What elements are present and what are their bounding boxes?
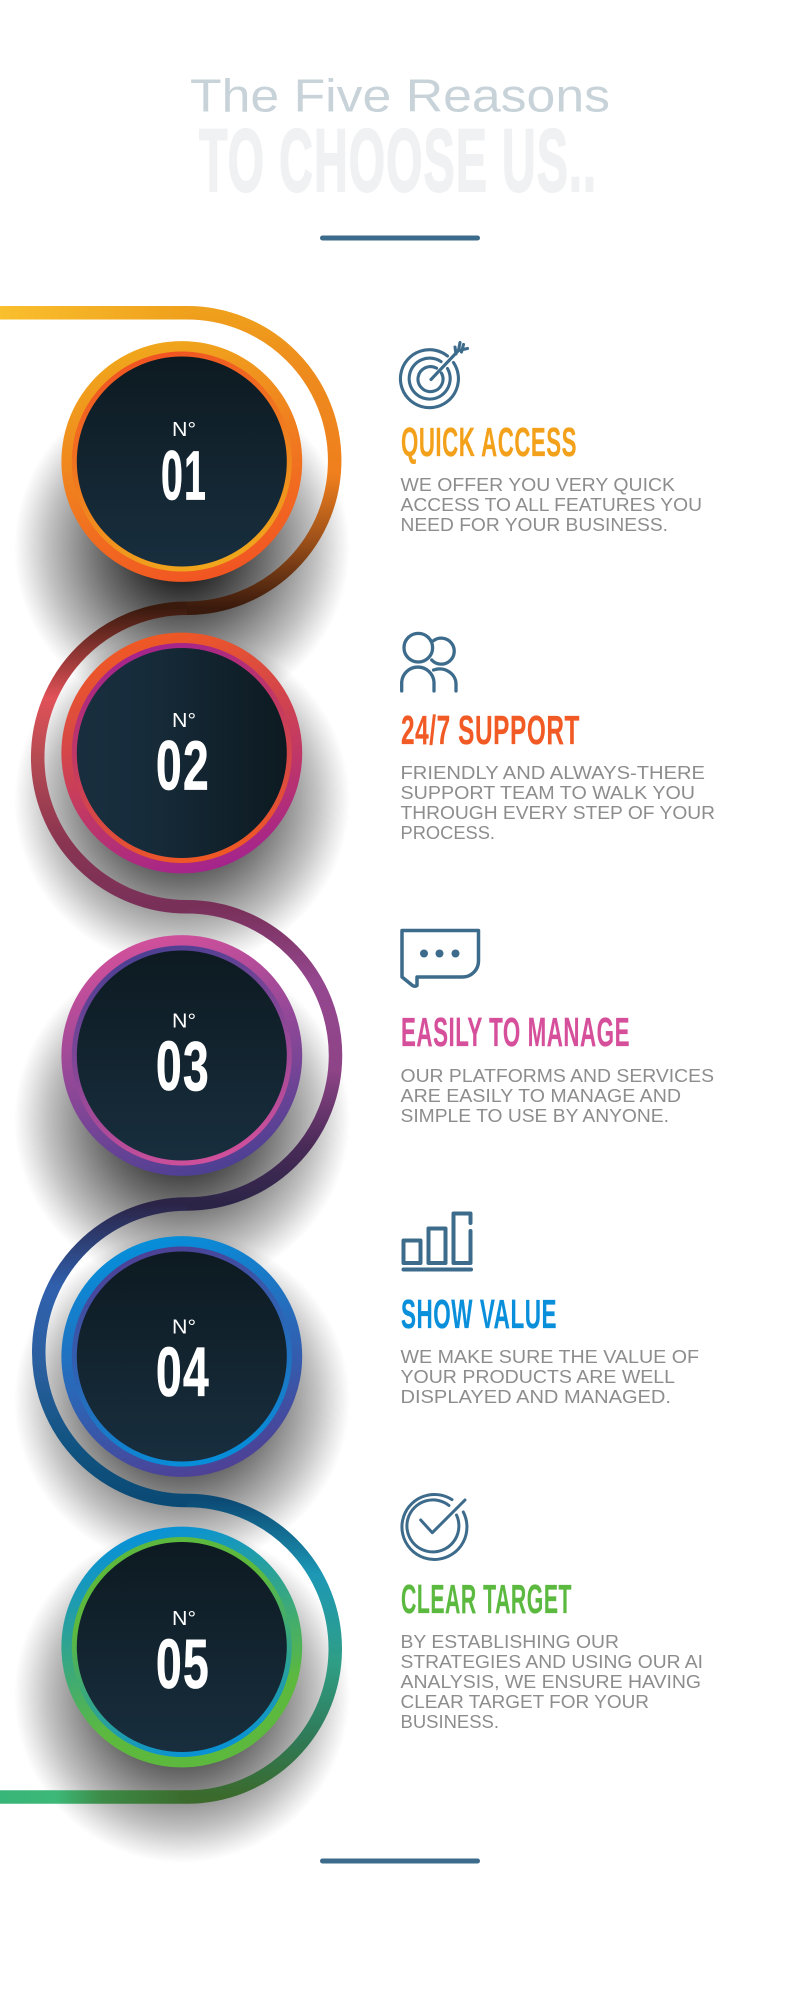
circle 03: 03 <box>156 1027 210 1105</box>
description: quick access: WE OFFER YOU VERY QUICK <box>400 474 676 495</box>
description: clear target <box>400 1631 703 1732</box>
description: easily to manage: SIMPLE TO USE BY ANYONE. <box>400 1105 669 1126</box>
description: quick access: ACCESS TO ALL FEATURES YOU <box>400 494 702 515</box>
circle 01: N° <box>172 419 196 441</box>
circle 02: N° <box>172 710 196 732</box>
description: clear target: BUSINESS. <box>400 1711 499 1732</box>
circle 05 <box>61 1527 302 1767</box>
description: show value: YOUR PRODUCTS ARE WELL <box>400 1366 675 1387</box>
heading: show value: SHOW VALUE <box>401 1291 557 1337</box>
description: easily to manage: OUR PLATFORMS AND SERVICES <box>400 1065 714 1086</box>
description: show value <box>400 1346 699 1407</box>
description: quick access: NEED FOR YOUR BUSINESS. <box>400 514 668 535</box>
description: easily to manage: ARE EASILY TO MANAGE AND <box>400 1085 681 1106</box>
description: 24/7 support <box>400 762 715 843</box>
description: quick access <box>400 474 702 535</box>
description: 24/7 support: THROUGH EVERY STEP OF YOUR <box>400 802 715 823</box>
icon: two people <box>402 633 456 691</box>
description: clear target: CLEAR TARGET FOR YOUR <box>400 1691 649 1712</box>
circle 01: 01 <box>161 436 207 514</box>
description: show value: DISPLAYED AND MANAGED. <box>400 1386 671 1407</box>
icon: chat bubble <box>402 930 478 986</box>
circle 02 <box>61 633 302 873</box>
winding gradient ribbon path <box>0 313 335 1797</box>
title <box>190 70 610 210</box>
circle 04: N° <box>172 1316 196 1338</box>
description: 24/7 support: SUPPORT TEAM TO WALK YOU <box>400 782 695 803</box>
icon: check mark in circle <box>402 1494 467 1559</box>
circle 03: N° <box>172 1010 196 1032</box>
bottom divider <box>320 1858 480 1864</box>
circle 04 <box>61 1236 302 1477</box>
circle 05: N° <box>172 1608 196 1630</box>
heading: clear target: CLEAR TARGET <box>401 1576 572 1622</box>
description: clear target: STRATEGIES AND USING OUR AI <box>400 1651 703 1672</box>
description: easily to manage <box>400 1065 714 1126</box>
circle 03 <box>61 935 302 1176</box>
circle 05: 05 <box>156 1625 210 1703</box>
description: 24/7 support: FRIENDLY AND ALWAYS-THERE <box>400 762 705 783</box>
top divider <box>320 236 480 240</box>
description: clear target: BY ESTABLISHING OUR <box>400 1631 619 1652</box>
circle 04: 04 <box>156 1333 210 1411</box>
icon: target with arrow <box>400 342 468 408</box>
description: 24/7 support: PROCESS. <box>400 822 495 843</box>
heading: 24/7 support: 24/7 SUPPORT <box>401 707 580 753</box>
circle 01 <box>61 341 302 582</box>
drop shadows behind circles <box>14 380 350 1863</box>
description: show value: WE MAKE SURE THE VALUE OF <box>400 1346 699 1367</box>
title line: The Five Reasons: The Five Reasons <box>190 70 610 122</box>
heading: quick access: QUICK ACCESS <box>401 419 577 465</box>
icon: bar chart <box>404 1214 471 1270</box>
circle 02: 02 <box>156 726 210 804</box>
description: clear target: ANALYSIS, WE ENSURE HAVING <box>400 1671 701 1692</box>
